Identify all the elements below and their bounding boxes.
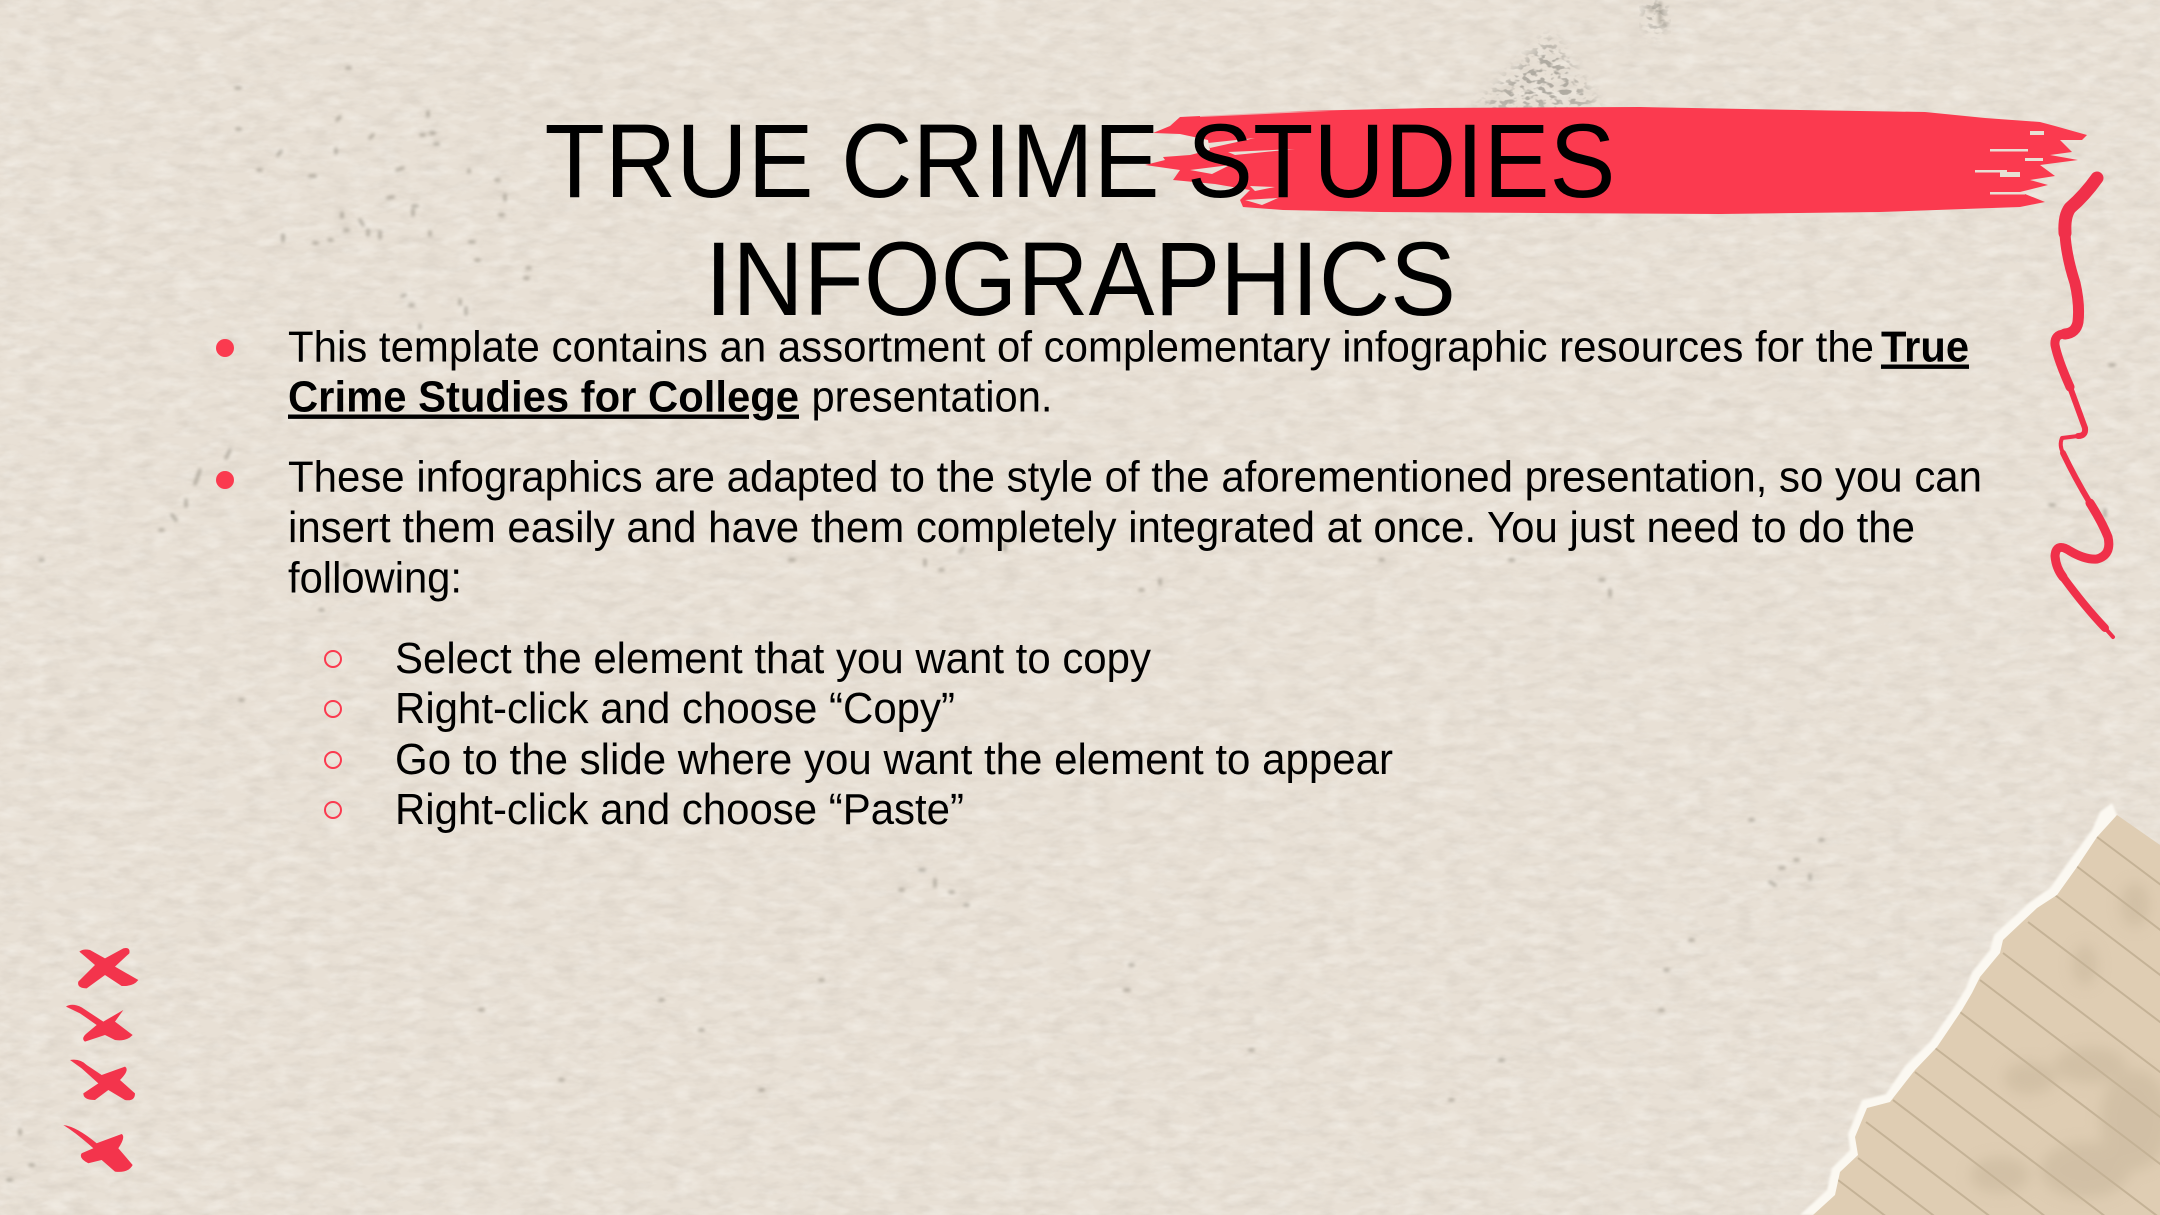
sub-list of steps: Right-click and choose “Copy” [395,684,955,733]
red brush stroke behind title [1145,107,2087,214]
sub-list of steps: Select the element that you want to copy [395,634,1151,683]
body text: bullet one: Crime Studies for College [288,372,799,422]
sub-list of steps: Right-click and choose “Paste” [395,785,964,834]
sub-list of steps: Go to the slide where you want the element to appear [395,735,1393,784]
X mark 3 [70,1060,135,1100]
X mark 1 [78,948,138,988]
X mark 2 [66,1005,133,1042]
sub-list of steps [325,634,1393,834]
torn notebook paper corner [1800,803,2160,1215]
title [544,103,1616,338]
tan paper sheet [1813,815,2160,1215]
red hand-drawn squiggle [2055,178,2113,637]
bullet marker [216,471,234,489]
red X marks [63,948,138,1172]
ruled lines [1838,837,2160,1215]
body text: bullet one: presentation. [812,372,1052,422]
body text: bullet one: This template contains an assortment of complementary infographic resources for the [288,322,1874,372]
X mark 4 [63,1125,133,1172]
mottled stains [1970,883,2160,1198]
title: TRUE CRIME STUDIES [544,103,1616,220]
title: INFOGRAPHICS [705,221,1456,338]
body text: bullet one [216,322,1969,422]
body text: bullet two: following: [288,554,462,602]
step markers [325,651,341,818]
body text: bullet two: These infographics are adapted to the style of the aforementioned presentation, so you can [288,452,1982,502]
bullet marker [216,339,234,357]
body text: bullet two [216,452,1982,602]
body text: bullet two: insert them easily and have them completely integrated at once. You just need to do the [288,503,1915,552]
body text: bullet one: True [1881,322,1969,372]
white torn edge [1800,803,2120,1215]
